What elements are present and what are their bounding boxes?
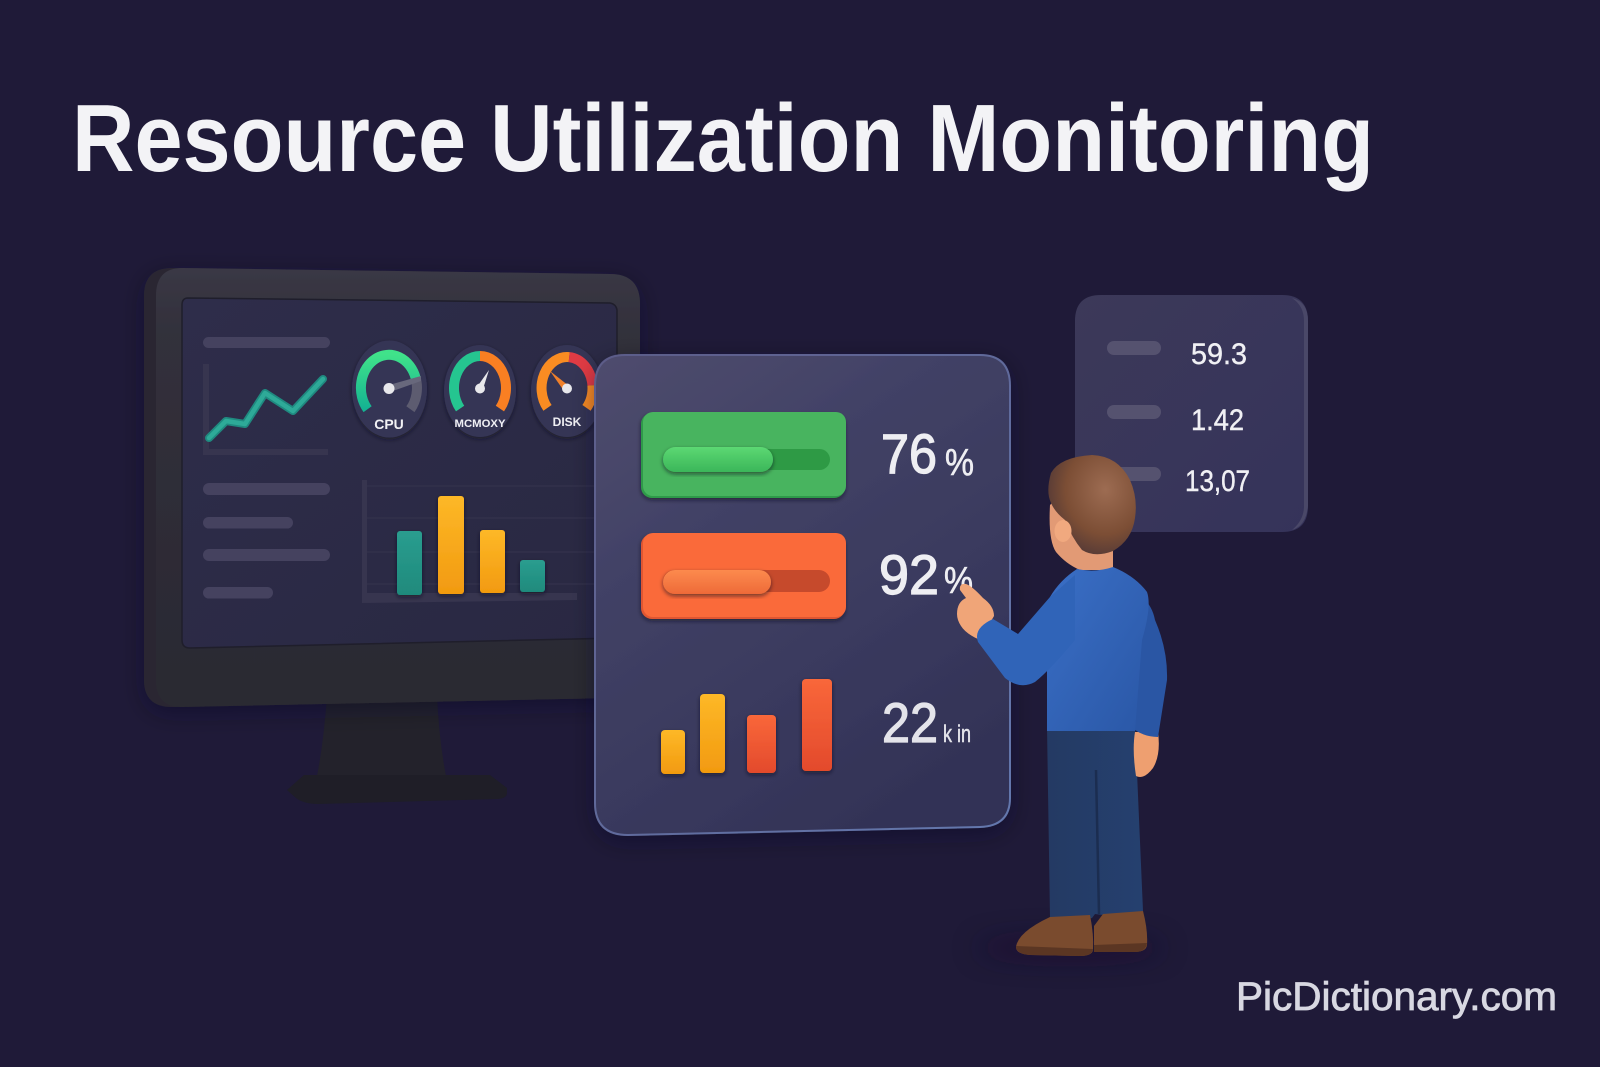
green value: 76 bbox=[881, 422, 937, 485]
green value bbox=[881, 422, 974, 485]
green progress card bbox=[641, 412, 846, 498]
bar chart value: 22 bbox=[882, 691, 938, 754]
metric row pills bbox=[1107, 341, 1161, 481]
gauge: memory: MCMOXY bbox=[454, 418, 506, 430]
title: Resource Utilization Monitoring bbox=[72, 85, 1374, 192]
metric values: 1.42 bbox=[1191, 404, 1244, 437]
trousers bbox=[1047, 726, 1143, 921]
monitor bezel bbox=[144, 268, 640, 707]
panel: main glass metrics card bbox=[595, 355, 1010, 835]
line chart bbox=[203, 364, 328, 455]
watermark: PicDictionary.com bbox=[1236, 975, 1557, 1019]
gauge: disk: DISK bbox=[553, 415, 582, 429]
metric values: 13,07 bbox=[1185, 465, 1250, 498]
person bbox=[957, 455, 1167, 958]
right shoe bbox=[1094, 911, 1147, 952]
neck and face bbox=[1050, 495, 1113, 570]
ear bbox=[1054, 520, 1072, 542]
green value: % bbox=[945, 442, 974, 484]
gauge: memory bbox=[444, 345, 516, 437]
monitor stand bbox=[287, 695, 507, 804]
gauge: disk bbox=[531, 345, 603, 437]
monitor screen bbox=[182, 298, 617, 648]
metric values: 59.3 bbox=[1191, 338, 1247, 371]
hair bbox=[1048, 455, 1136, 554]
right sleeve bbox=[1125, 590, 1167, 737]
monitor bbox=[144, 268, 640, 804]
left shoe bbox=[1016, 915, 1093, 956]
bar chart value: k in bbox=[943, 721, 971, 748]
torso bbox=[1046, 567, 1149, 731]
orange value: % bbox=[944, 560, 973, 602]
orange progress card bbox=[641, 533, 846, 619]
header placeholder bar bbox=[203, 337, 330, 348]
orange value: 92 bbox=[879, 543, 939, 606]
right hand bbox=[1134, 732, 1159, 777]
gauge: CPU bbox=[352, 340, 427, 438]
metric values bbox=[1185, 338, 1250, 498]
panel bar chart bbox=[661, 679, 832, 774]
pointing arm bbox=[977, 575, 1075, 685]
gauge: CPU: CPU bbox=[374, 416, 404, 432]
text placeholder bars bbox=[203, 483, 330, 598]
panel: secondary metrics card bbox=[1075, 295, 1308, 532]
orange value bbox=[879, 543, 973, 606]
bar chart value bbox=[882, 691, 971, 754]
pointing hand bbox=[957, 584, 994, 640]
monitor bar chart bbox=[362, 480, 595, 603]
floor shadow bbox=[975, 938, 1165, 958]
